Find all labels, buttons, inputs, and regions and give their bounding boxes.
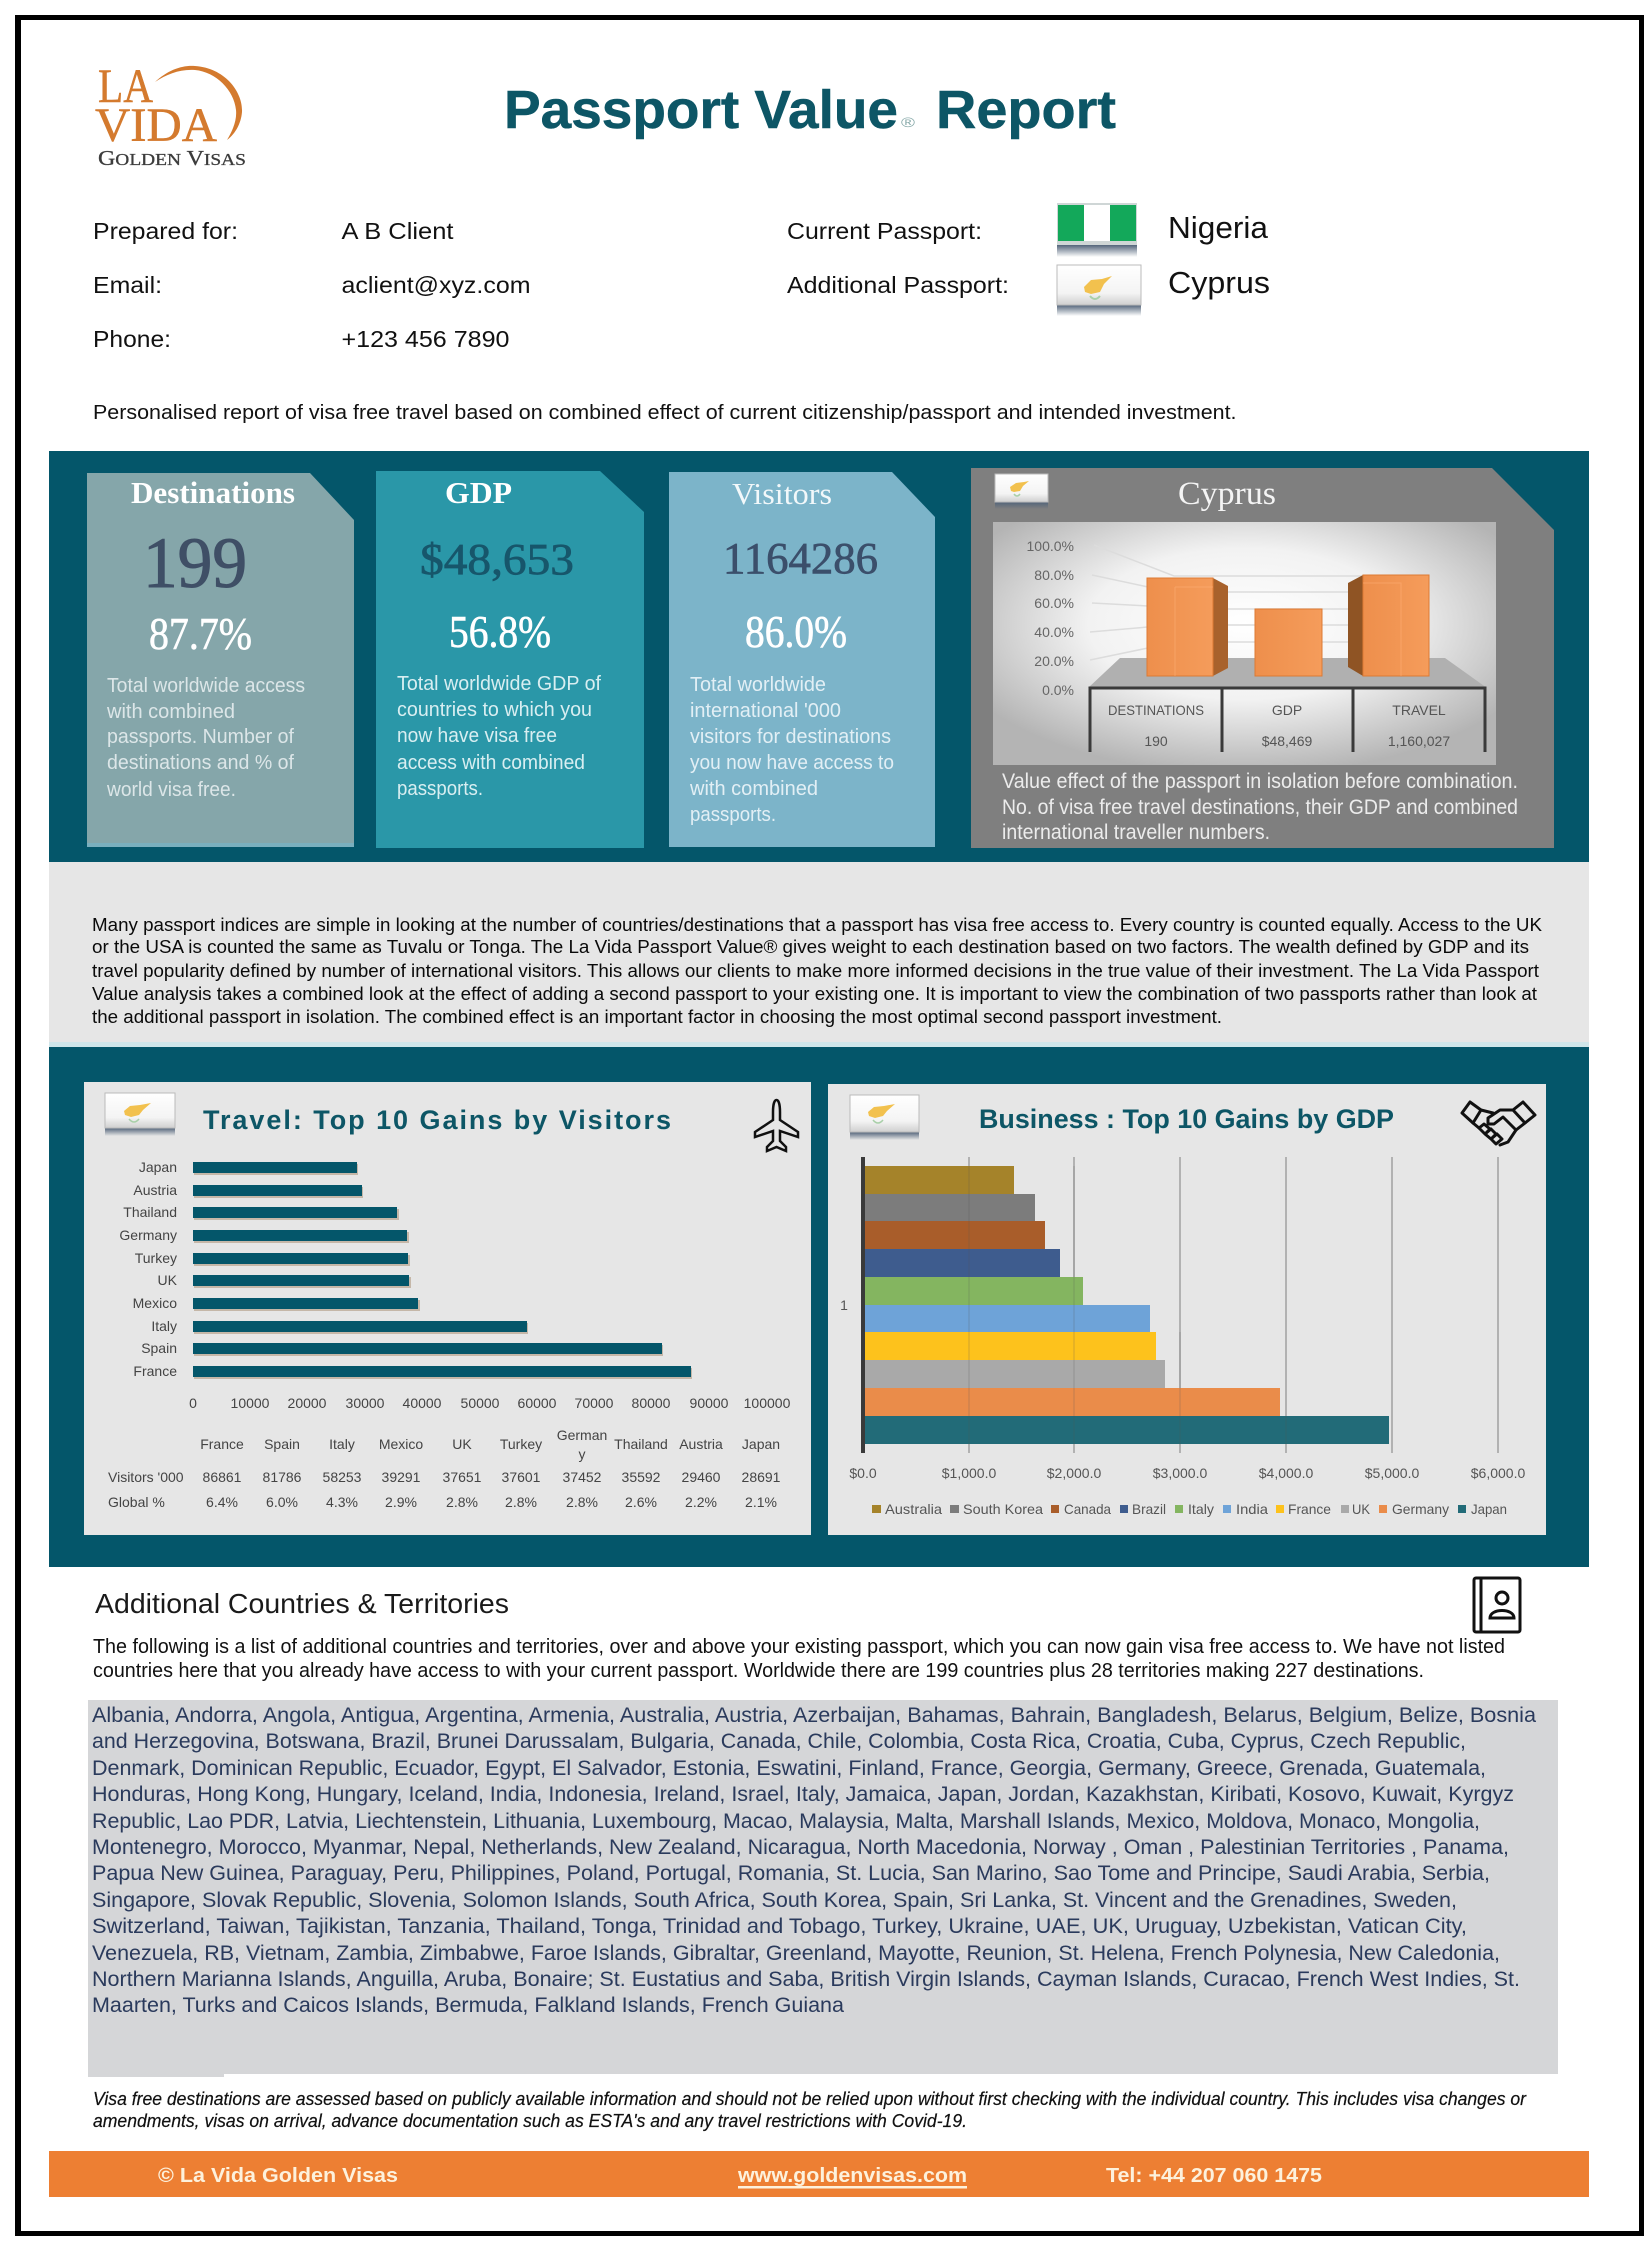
- bar chart: visitors: 40000: [403, 1395, 442, 1411]
- panel: visitors card: passports.: [690, 804, 776, 826]
- panel: destinations card: with combined: [106, 701, 235, 723]
- panel: GDP card: [376, 471, 644, 848]
- panel: visitors card: international '000: [690, 700, 841, 722]
- bar chart: visitors: Austria: [133, 1182, 177, 1198]
- bar chart: visitors: 80000: [632, 1395, 671, 1411]
- panel: Cyprus isolation card: Value effect of the passport in isolation before combination.: [1002, 770, 1518, 793]
- data table: visitors: 2.2%: [685, 1494, 717, 1510]
- data table: visitors: 2.1%: [745, 1494, 777, 1510]
- bar chart: GDP: $0.0: [849, 1465, 877, 1481]
- logo: La Vida Golden Visas: GOLDEN VISAS: [98, 146, 246, 170]
- chart legend: France: [1288, 1501, 1331, 1517]
- bar chart: visitors: UK: [158, 1272, 178, 1288]
- panel: country list: Switzerland, Taiwan, Tajikistan, Tanzania, Thailand, Tonga, Trinidad and Tobago, Turkey, Ukraine, UAE, UK, Uruguay, Uzbekistan, Vatican City,: [92, 1915, 1467, 1938]
- chart legend: [872, 1501, 1507, 1517]
- panel: explanation text: Value analysis takes a combined look at the effect of adding a second passport to your existing one. It is important to view the combination of two passports rather than look at: [92, 983, 1537, 1004]
- data table: visitors: Turkey: [500, 1436, 542, 1452]
- data table: visitors: 81786: [263, 1469, 302, 1485]
- bar chart: visitors: Germany: [119, 1227, 177, 1243]
- bar chart: visitors: 60000: [518, 1395, 557, 1411]
- data table: visitors: 28691: [742, 1469, 781, 1485]
- data table: visitors: 29460: [682, 1469, 721, 1485]
- bar chart: GDP: $2,000.0: [1047, 1465, 1101, 1481]
- panel: country list: Northern Marianna Islands, Anguilla, Aruba, Bonaire; St. Eustatius and Saba, British Virgin Islands, Cayman Islands, Curacao, French West Indies, St.: [92, 1968, 1520, 1991]
- panel: GDP card: GDP: [445, 475, 512, 510]
- data table: visitors: 2.8%: [566, 1494, 598, 1510]
- panel: destinations card: 87.7%: [149, 608, 252, 659]
- bar chart: visitors: 10000: [231, 1395, 270, 1411]
- bar chart: visitors: 100000: [744, 1395, 791, 1411]
- 3D column chart: 40.0%: [1034, 624, 1074, 640]
- panel: destinations card: Total worldwide access: [107, 675, 305, 697]
- data table: visitors: German: [557, 1427, 607, 1443]
- bar chart: visitors: 20000: [288, 1395, 327, 1411]
- panel: explanation text: travel popularity defined by number of international visitors. This allows our clients to make more informed decisions in the true value of their investment. The La Vida Passport: [92, 960, 1539, 981]
- bar chart: visitors: 70000: [575, 1395, 614, 1411]
- bar: GDP: [1255, 609, 1322, 676]
- bar chart: GDP: 1: [840, 1297, 848, 1313]
- passport details: [787, 210, 1270, 300]
- data table: visitors: 4.3%: [326, 1494, 358, 1510]
- data table: visitors: 2.8%: [446, 1494, 478, 1510]
- panel: country list: Denmark, Dominican Republic, Ecuador, Egypt, El Salvador, Estonia, Eswatini, Finland, France, Georgia, Germany, Greece, Grenada, Guatemala,: [92, 1757, 1486, 1780]
- disclaimer: [93, 2089, 1527, 2131]
- panel: country list: [88, 1700, 1558, 2077]
- icon: handshake: [1462, 1102, 1535, 1145]
- bar chart: visitors: 90000: [690, 1395, 729, 1411]
- data table: visitors: 2.8%: [505, 1494, 537, 1510]
- client details: [93, 218, 530, 352]
- icon: Cyprus flag: [105, 1093, 175, 1136]
- 3D column chart: 20.0%: [1034, 653, 1074, 669]
- data table: visitors: Japan: [742, 1436, 780, 1452]
- panel: top teal band: [49, 451, 1589, 862]
- panel: explanation text: Many passport indices are simple in looking at the number of countries/destinations that a passport has visa free access to. Every country is counted equally. Access to the UK: [92, 914, 1543, 935]
- panel: country list: Papua New Guinea, Paraguay, Peru, Philippines, Poland, Portugal, Romania, St. Lucia, San Marino, Sao Tome and Principe, Saudi Arabia, Serbia,: [92, 1862, 1490, 1885]
- 3D column chart: 100.0%: [1027, 538, 1074, 554]
- data table: visitors: UK: [452, 1436, 472, 1452]
- panel: destinations card: destinations and % of: [107, 752, 294, 774]
- data table: visitors: Austria: [679, 1436, 723, 1452]
- data table: visitors: 37601: [502, 1469, 541, 1485]
- bar: destinations: [1147, 578, 1228, 676]
- bar chart: GDP: $3,000.0: [1153, 1465, 1207, 1481]
- footer bar: [49, 2151, 1589, 2197]
- panel: visitors card: visitors for destinations: [690, 726, 891, 748]
- 3D column chart: $48,469: [1262, 733, 1313, 749]
- 3D column chart: 60.0%: [1034, 595, 1074, 611]
- panel: country list: Honduras, Hong Kong, Hungary, Iceland, India, Indonesia, Ireland, Israel, Italy, Jamaica, Japan, Jordan, Kazakhstan, Kiribati, Kosovo, Kuwait, Kyrgyz: [92, 1783, 1514, 1806]
- title: Passport Value: [504, 80, 898, 140]
- panel: destinations card: [87, 473, 354, 847]
- panel: GDP card: now have visa free: [397, 725, 557, 747]
- panel: explanation text: the additional passport in isolation. The combined effect is an important factor in choosing the most optimal second passport investment.: [92, 1006, 1222, 1027]
- panel: country list: Singapore, Slovak Republic, Slovenia, Solomon Islands, South Africa, South Korea, Spain, Sri Lanka, St. Vincent and the Grenadines, Sweden,: [92, 1889, 1457, 1912]
- heading: additional countries: Additional Countries & Territories: [95, 1588, 509, 1619]
- title: Report: [936, 80, 1116, 140]
- panel: country list: Venezuela, RB, Vietnam, Zambia, Zimbabwe, Faroe Islands, Gibraltar, Greenland, Mayotte, Reunion, St. Helena, French Polynesia, New Caledonia,: [92, 1942, 1500, 1965]
- description text: [93, 1636, 1505, 1682]
- title: ®: [901, 114, 916, 130]
- panel: visitors card: with combined: [689, 778, 818, 800]
- icon: Cyprus flag small: [995, 474, 1048, 509]
- data table: visitors: Italy: [329, 1436, 355, 1452]
- panel: GDP card: $48,653: [420, 535, 574, 584]
- data table: visitors: 2.6%: [625, 1494, 657, 1510]
- data table: visitors: Thailand: [614, 1436, 668, 1452]
- panel: country list: Albania, Andorra, Angola, Antigua, Argentina, Armenia, Australia, Austria, Azerbaijan, Bahamas, Bahrain, Bangladesh, Belarus, Belgium, Belize, Bosnia: [92, 1704, 1536, 1727]
- chart legend: UK: [1352, 1501, 1371, 1517]
- panel: explanation text: or the USA is counted the same as Tuvalu or Tonga. The La Vida Passport Value® gives weight to each destination based on two factors. The wealth defined by GDP and its: [92, 936, 1529, 957]
- 3D column chart: TRAVEL: [1392, 702, 1446, 718]
- chart legend: Japan: [1471, 1501, 1507, 1517]
- panel: GDP card: passports.: [397, 778, 483, 800]
- bar chart: visitors: Japan: [139, 1159, 177, 1175]
- data table: visitors: 86861: [203, 1469, 242, 1485]
- footer bar: Tel: +44 207 060 1475: [1106, 2165, 1322, 2187]
- 3D column chart: GDP: [1272, 702, 1302, 718]
- chart legend: South Korea: [963, 1501, 1043, 1517]
- panel: Cyprus isolation card: Cyprus: [1178, 476, 1276, 512]
- chart legend: Italy: [1188, 1501, 1214, 1517]
- disclaimer: amendments, visas on arrival, advance documentation such as ESTA's and any travel restrictions with Covid-19.: [93, 2111, 967, 2131]
- panel: GDP card: Total worldwide GDP of: [397, 673, 601, 695]
- client details: A B Client: [342, 218, 454, 244]
- bar chart: visitors: Spain: [141, 1340, 177, 1356]
- panel: business top 10: [828, 1084, 1546, 1535]
- icon: Cyprus flag: [1057, 265, 1141, 1287]
- description text: countries here that you already have access to with your current passport. Worldwide there are 199 countries plus 28 territories making 227 destinations.: [93, 1660, 1424, 1682]
- panel: Cyprus isolation card: [971, 468, 1554, 848]
- bar chart: visitors: Turkey: [135, 1250, 177, 1266]
- 3D column chart: 0.0%: [1042, 682, 1074, 698]
- icon: passport notebook: [1474, 1578, 1520, 1632]
- data table: visitors: 39291: [382, 1469, 421, 1485]
- 3D column chart: 190: [1144, 733, 1168, 749]
- panel: GDP card: countries to which you: [397, 699, 592, 721]
- panel: visitors card: Visitors: [732, 476, 832, 511]
- client details: Prepared for:: [93, 218, 238, 244]
- panel: country list: Montenegro, Morocco, Myanmar, Nepal, Netherlands, New Zealand, Nicaragua, North Macedonia, Norway , Oman , Palestinian Territories , Panama,: [92, 1836, 1509, 1859]
- chart legend: Germany: [1392, 1501, 1449, 1517]
- bar chart: GDP: $5,000.0: [1365, 1465, 1419, 1481]
- icon: plane: [755, 1100, 798, 1151]
- bar chart: visitors: France: [133, 1363, 177, 1379]
- bar chart: GDP: $4,000.0: [1259, 1465, 1313, 1481]
- panel: lower teal band: [49, 1047, 1589, 1567]
- 3D column chart: DESTINATIONS: [1108, 702, 1204, 718]
- bar chart: visitors: Thailand: [123, 1204, 177, 1220]
- title: [504, 80, 1116, 140]
- logo: La Vida Golden Visas: VIDA: [95, 99, 217, 152]
- panel: travel top 10: [84, 1082, 811, 1535]
- panel: GDP card: access with combined: [397, 752, 585, 774]
- logo: La Vida Golden Visas: LA: [98, 60, 153, 113]
- chart legend: Brazil: [1132, 1501, 1166, 1517]
- 3D column chart: 1,160,027: [1388, 733, 1450, 749]
- data table: visitors: Global %: [108, 1494, 165, 1510]
- data table: visitors: 2.9%: [385, 1494, 417, 1510]
- bar chart: GDP: $1,000.0: [942, 1465, 996, 1481]
- bar chart: visitors: 0: [189, 1395, 197, 1411]
- bar chart: GDP: [840, 1157, 1525, 1481]
- client details: Email:: [93, 272, 162, 298]
- panel: GDP card: 56.8%: [449, 606, 551, 657]
- panel: Cyprus isolation card: No. of visa free travel destinations, their GDP and combined: [1002, 796, 1518, 819]
- panel: destinations card: passports. Number of: [107, 726, 294, 748]
- bar chart: GDP: $6,000.0: [1471, 1465, 1525, 1481]
- panel: destinations card: world visa free.: [106, 779, 236, 801]
- bar chart: visitors: [119, 1159, 791, 1411]
- footer bar: www.goldenvisas.com: [737, 2165, 967, 2187]
- chart legend: India: [1236, 1501, 1268, 1517]
- passport details: Nigeria: [1168, 210, 1269, 245]
- data table: visitors: 37452: [563, 1469, 602, 1485]
- footer bar: © La Vida Golden Visas: [158, 2165, 398, 2187]
- bar chart: visitors: 50000: [461, 1395, 500, 1411]
- bar chart: visitors: 30000: [346, 1395, 385, 1411]
- bar chart: visitors: Italy: [151, 1318, 177, 1334]
- client details: +123 456 7890: [342, 326, 510, 352]
- panel: destinations card: 199: [143, 523, 247, 603]
- client details: aclient@xyz.com: [342, 272, 530, 298]
- 3D column chart: 80.0%: [1034, 567, 1074, 583]
- panel: destinations card: Destinations: [131, 475, 295, 510]
- panel: visitors card: [669, 472, 935, 847]
- logo: La Vida Golden Visas: [95, 60, 246, 170]
- panel: Cyprus isolation card: international traveller numbers.: [1002, 821, 1270, 844]
- heading: business: Business : Top 10 Gains by GDP: [979, 1104, 1394, 1134]
- bar chart: visitors: Mexico: [133, 1295, 177, 1311]
- description text: The following is a list of additional countries and territories, over and above your existing passport, which you can now gain visa free access to. We have not listed: [93, 1636, 1505, 1658]
- data table: visitors: 58253: [323, 1469, 362, 1485]
- data table: visitors: 35592: [622, 1469, 661, 1485]
- passport details: Additional Passport:: [787, 272, 1009, 298]
- 3D column chart: [993, 522, 1496, 765]
- data table: visitors: y: [578, 1446, 586, 1462]
- intro sentence: Personalised report of visa free travel based on combined effect of current citizenship/passport and intended investment.: [93, 402, 1236, 424]
- client details: Phone:: [93, 326, 171, 352]
- panel: visitors card: 1164286: [723, 534, 878, 583]
- disclaimer: Visa free destinations are assessed based on publicly available information and should not be relied upon without first checking with the individual country. This includes visa changes or: [93, 2089, 1527, 2109]
- bar: travel: [1348, 575, 1429, 676]
- panel: visitors card: Total worldwide: [690, 674, 826, 696]
- panel: country list: Maarten, Turks and Caicos Islands, Bermuda, Falkland Islands, French Guiana: [92, 1994, 844, 2017]
- data table: visitors: 37651: [443, 1469, 482, 1485]
- data table: visitors: [108, 1427, 781, 1510]
- chart legend: Australia: [885, 1501, 942, 1517]
- data table: visitors: Mexico: [379, 1436, 423, 1452]
- panel: explanation text: [49, 862, 1589, 1047]
- data table: visitors: 6.0%: [266, 1494, 298, 1510]
- icon: Nigeria flag: [1057, 203, 1137, 257]
- panel: country list: Republic, Lao PDR, Latvia, Liechtenstein, Lithuania, Luxembourg, Macao, Malaysia, Malta, Marshall Islands, Mexico, Moldova, Monaco, Mongolia,: [92, 1810, 1480, 1833]
- chart legend: Canada: [1064, 1501, 1111, 1517]
- icon: Cyprus flag: [850, 1095, 919, 1140]
- panel: visitors card: you now have access to: [690, 752, 894, 774]
- passport details: Cyprus: [1168, 265, 1270, 300]
- panel: visitors card: 86.0%: [745, 606, 847, 657]
- data table: visitors: Spain: [264, 1436, 300, 1452]
- heading: travel: Travel: Top 10 Gains by Visitors: [203, 1105, 671, 1135]
- data table: visitors: France: [200, 1436, 244, 1452]
- passport details: Current Passport:: [787, 218, 982, 244]
- data table: visitors: Visitors '000: [108, 1469, 184, 1485]
- panel: country list: and Herzegovina, Botswana, Brazil, Brunei Darussalam, Bulgaria, Canada, Chile, Colombia, Costa Rica, Croatia, Cuba, Cyprus, Czech Republic,: [92, 1730, 1466, 1753]
- data table: visitors: 6.4%: [206, 1494, 238, 1510]
